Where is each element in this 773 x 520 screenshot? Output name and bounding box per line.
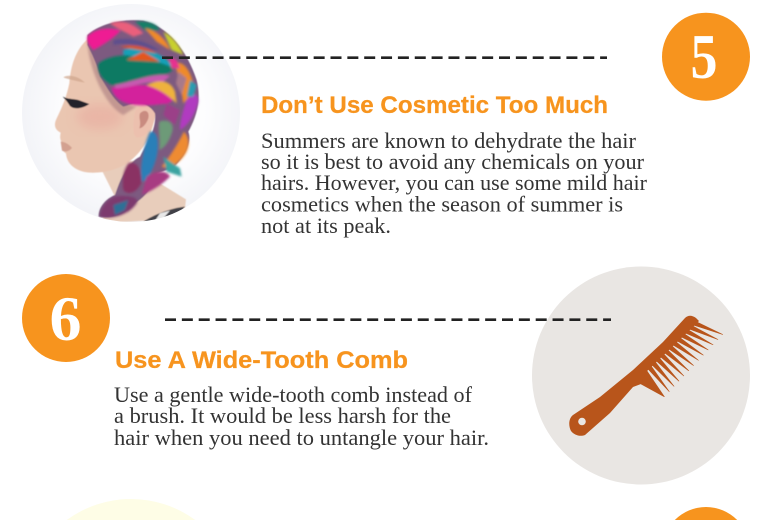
hair: orange back [162, 132, 189, 168]
dark top [143, 207, 185, 224]
dashed connector: step 5 [162, 56, 607, 59]
badge: number 6: 6 [50, 283, 82, 354]
next section badge: orange, cropped [675, 507, 737, 520]
text block: step 6 description: hair when you need to untangle your hair. [114, 425, 489, 450]
neck and shoulder [100, 157, 186, 223]
hair: top stripes [110, 22, 143, 37]
text block: step 5 description: cosmetics when the season of summer is [261, 192, 623, 216]
eye makeup [63, 97, 89, 108]
text block: step 5 description: Summers are known to dehydrate the hair [261, 128, 637, 153]
hair: green [98, 55, 173, 85]
hair: magenta lower [112, 85, 173, 105]
text block: step 5 description: so it is best to avoid any chemicals on your [261, 149, 644, 174]
heading: Use A Wide-Tooth Comb: Use A Wide-Tooth Comb [115, 347, 408, 374]
lips [61, 142, 72, 151]
hairline shadow [87, 43, 137, 115]
dashed connector: step 6 [165, 318, 611, 321]
badge: number 6 [22, 274, 110, 362]
hair: braid stripes [175, 63, 195, 103]
comb hole [578, 418, 586, 425]
comb teeth [641, 322, 723, 397]
comb body [569, 316, 699, 436]
text block: step 6 description: Use a gentle wide-tooth comb instead of [114, 382, 472, 407]
face [55, 36, 156, 173]
hair: pink front [87, 29, 121, 50]
text block: step 6 description: a brush. It would be less harsh for the [114, 403, 451, 428]
text block: step 5 description: hairs. However, you can use some mild hair [261, 170, 647, 195]
next section circle: pale yellow, cropped [67, 499, 195, 520]
hair: blue braid [141, 131, 158, 182]
badge: number 5: 5 [690, 21, 718, 92]
text block: step 5 description: not at its peak. [261, 213, 391, 238]
photo circle: woman with rainbow braided hair [22, 4, 240, 224]
text block: step 6 description [114, 382, 489, 450]
heading: Don't Use Cosmetic Too Much: Don’t Use Cosmetic Too Much [261, 92, 608, 119]
hair: lower braid [123, 163, 142, 193]
text block: step 5 description [261, 128, 647, 238]
photo circle: wide-tooth comb [532, 266, 750, 484]
ear [154, 116, 155, 120]
hair: main mass [87, 20, 199, 218]
badge: number 5 [662, 13, 750, 101]
